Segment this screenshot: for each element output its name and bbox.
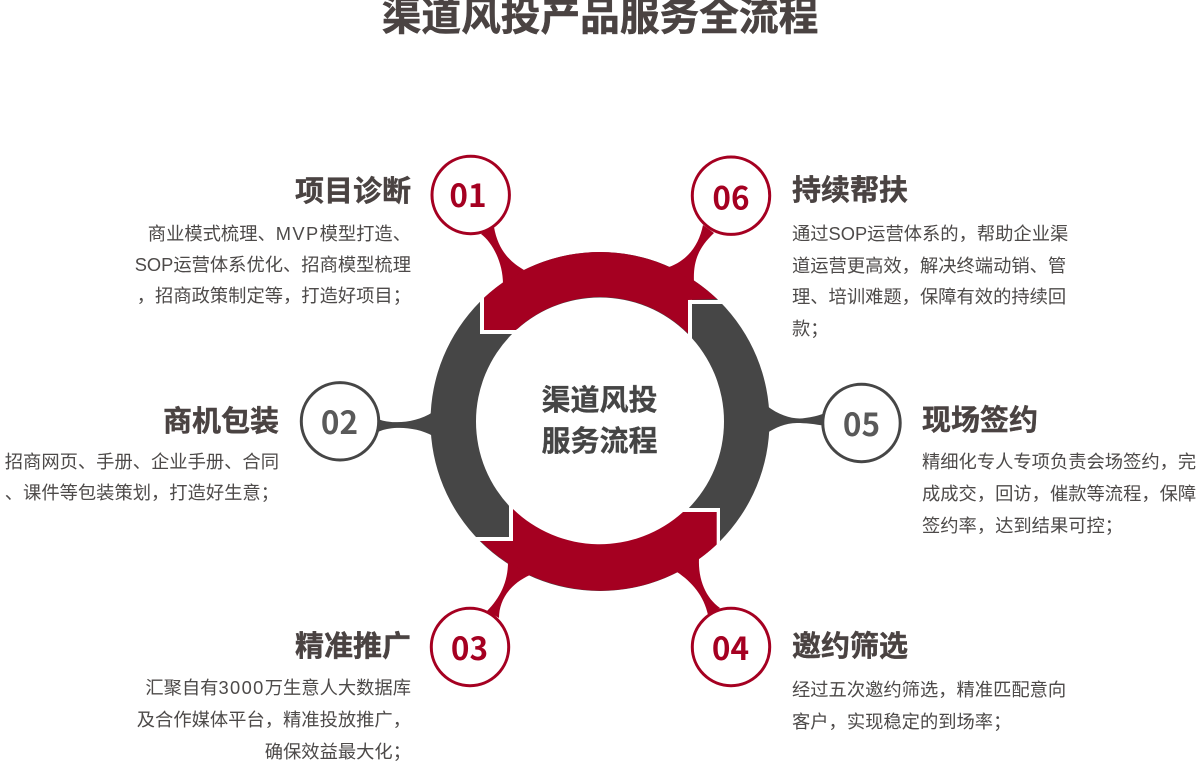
body: 03: 及合作媒体平台，精准投放推广， <box>137 709 411 730</box>
connector: 06 <box>669 225 714 282</box>
body: 05: 成成交，回访，催款等流程，保障 <box>922 483 1196 504</box>
body: 06 <box>792 223 1068 339</box>
step circle 06: 06 <box>712 174 750 220</box>
body: 03 <box>137 677 411 762</box>
body: 01: ，招商政策制定等，打造好项目； <box>137 285 411 306</box>
top red arc segment <box>484 252 717 334</box>
heading: 03: 精准推广 <box>295 631 411 663</box>
step circle 03 <box>431 608 509 686</box>
bottom red arc segment <box>480 509 717 591</box>
body: 02: 、课件等包装策划，打造好生意； <box>5 482 279 503</box>
white separators <box>472 290 728 550</box>
body: 01: SOP运营体系优化、招商模型梳理 <box>135 254 411 275</box>
step circle 06 <box>692 157 770 234</box>
heading: 05: 现场签约 <box>922 405 1038 437</box>
step circle 04: 04 <box>712 624 749 670</box>
heading: 02: 商机包装 <box>163 406 279 438</box>
body: 06: 道运营更高效，解决终端动销、管 <box>792 255 1066 276</box>
connector: 03 <box>487 562 530 618</box>
grey ring <box>430 252 770 591</box>
center label: 渠道风投 <box>541 385 658 417</box>
connector: 05 <box>767 406 825 433</box>
step circle 04 <box>692 608 770 686</box>
body: 04: 经过五次邀约筛选，精准匹配意向 <box>792 679 1066 700</box>
body: 06: 通过SOP运营体系的，帮助企业渠 <box>792 223 1068 244</box>
step circle 03: 03 <box>451 624 488 670</box>
step circle 01: 01 <box>449 171 487 217</box>
body: 05: 精细化专人专项负责会场签约，完 <box>922 451 1196 472</box>
body: 03: 汇聚自有3000万生意人大数据库 <box>145 677 411 698</box>
connector: 02 <box>378 412 433 436</box>
body: 05 <box>922 451 1196 536</box>
connector: 01 <box>481 227 524 284</box>
center label: 服务流程 <box>541 426 658 458</box>
heading: 01: 项目诊断 <box>295 176 411 208</box>
body: 04 <box>792 679 1066 732</box>
body: 01: 商业模式梳理、MVP模型打造、 <box>148 223 411 244</box>
heading: 04: 邀约筛选 <box>792 631 908 663</box>
step circle 01 <box>432 156 509 234</box>
heading: 06: 持续帮扶 <box>792 175 908 207</box>
step circle 05 <box>823 384 900 462</box>
body: 04: 客户，实现稳定的到场率； <box>792 711 1011 732</box>
body: 03: 确保效益最大化； <box>265 741 411 762</box>
body: 02 <box>5 451 279 503</box>
connector: 04 <box>677 558 720 615</box>
step circle 05: 05 <box>843 400 880 446</box>
step circle 02: 02 <box>321 398 358 444</box>
body: 06: 款； <box>792 318 829 339</box>
center label <box>541 384 658 458</box>
step circle 02 <box>301 383 379 460</box>
body: 01 <box>135 223 411 306</box>
body: 02: 招商网页、手册、企业手册、合同 <box>5 451 279 472</box>
body: 05: 签约率，达到结果可控； <box>922 515 1123 536</box>
body: 06: 理、培训难题，保障有效的持续回 <box>792 286 1066 307</box>
